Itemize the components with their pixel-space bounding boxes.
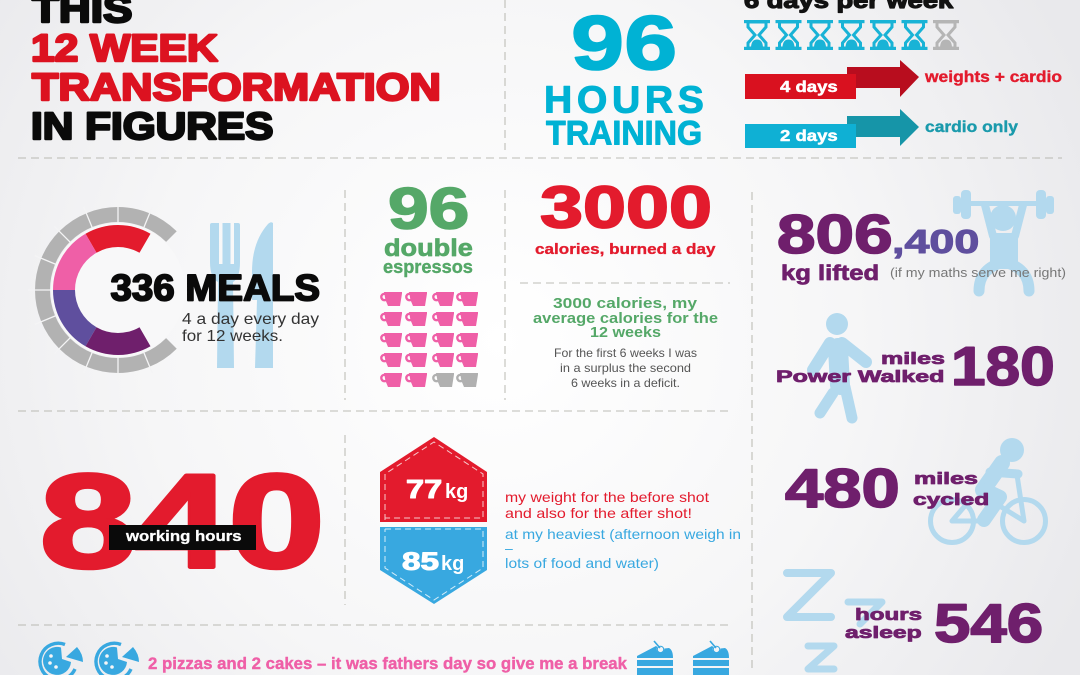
- arrow: 4 days weights + cardio: weights + cardio: [924, 68, 1062, 86]
- text: average calories: average calories for the: [533, 310, 718, 327]
- icon: weightlifter: [953, 190, 1054, 291]
- heading: 336 meals: 336 MEALS: [110, 267, 320, 308]
- panel: 546 hours asleep: asleep: [845, 624, 922, 642]
- text: meals description: 4 a day every day: [182, 311, 319, 328]
- panel: 180 miles power walked: 180: [951, 336, 1055, 397]
- arrow: 4 days weights + cardio: [745, 60, 1062, 99]
- 96 hours training: [544, 0, 708, 153]
- icons: cups: [381, 292, 478, 387]
- icons: pizzas: [40, 643, 139, 675]
- 96 hours training: HOURS: [544, 79, 708, 121]
- arrow: 2 days cardio only: [745, 109, 1019, 148]
- panel: 336 meals: [28, 200, 320, 380]
- text: average calories: 3000 calories, my: [553, 295, 698, 312]
- arrow: 2 days cardio only: cardio only: [925, 118, 1019, 136]
- badge: 85kg: [380, 527, 487, 604]
- panel: espressos: double: [384, 235, 473, 262]
- panel: 180 miles power walked: miles: [881, 349, 945, 368]
- chart: meals ring: [28, 200, 240, 380]
- text: surplus and deficit: 6 weeks in a deficit.: [571, 376, 680, 390]
- text: weight notes: and also for the after shot!: [505, 505, 692, 521]
- text: meals description: [182, 311, 319, 345]
- panel: 180 miles power walked: [776, 336, 1055, 397]
- panel: 806,400 kg lifted: 806: [777, 204, 893, 265]
- arrow: 2 days cardio only: 2 days: [780, 126, 838, 145]
- panel: 806,400 kg lifted: (if my maths serve me right): [890, 265, 1066, 280]
- title: IN FIGURES: [31, 105, 273, 147]
- text: weight notes: –: [505, 540, 513, 556]
- arrow: 4 days weights + cardio: 4 days: [780, 77, 838, 96]
- panel: 840 working hours: 840: [40, 446, 325, 595]
- icon: cyclist: [930, 438, 1046, 542]
- panel: pizzas and cakes: [40, 641, 729, 675]
- text: weight notes: lots of food and water): [505, 555, 659, 571]
- text: average calories: [533, 295, 718, 341]
- panel: 480 miles cycled: 480: [785, 458, 900, 519]
- panel: 3000 calories: calories, burned a day: [535, 241, 716, 258]
- panel: 480 miles cycled: [785, 458, 989, 519]
- panel: 806,400 kg lifted: kg lifted: [781, 261, 879, 284]
- text: weight notes: [505, 489, 741, 571]
- panel: 480 miles cycled: miles: [914, 469, 978, 488]
- text: weight notes: my weight for the before shot: [505, 489, 709, 505]
- icon: fork and knife: [210, 222, 273, 368]
- title: 12 WEEK: [31, 26, 218, 69]
- text: pizzas and cakes: 2 pizzas and 2 cakes – it was fathers day so give me a break: [148, 654, 628, 673]
- panel: 480 miles cycled: cycled: [913, 490, 989, 509]
- icon: sleep Zs: [787, 573, 882, 669]
- badge: 85kg: kg: [441, 553, 464, 575]
- text: surplus and deficit: For the first 6 weeks I was: [554, 346, 697, 360]
- icons: hourglass row: [744, 20, 959, 50]
- panel: 546 hours asleep: [845, 592, 1043, 654]
- text: weight notes: at my heaviest (afternoon weigh in: [505, 526, 741, 542]
- panel: 806,400 kg lifted: ,400: [892, 224, 979, 261]
- text: average calories: 12 weeks: [590, 324, 661, 341]
- badge: 77kg: kg: [445, 481, 468, 503]
- badge: 77kg: [380, 437, 487, 522]
- 96 hours training: 96: [571, 0, 677, 86]
- icon: walker: [813, 313, 866, 418]
- panel: espressos: espressos: [383, 257, 473, 277]
- title: [31, 0, 441, 147]
- panel: 806,400 kg lifted: [777, 204, 1066, 284]
- panel: 840 working hours: working hours: [125, 529, 242, 545]
- panel: espressos: 96: [388, 176, 469, 241]
- badge: 77kg: 77: [406, 475, 442, 504]
- panel: 546 hours asleep: hours: [855, 605, 922, 624]
- panel: 3000 calories: 3000: [540, 174, 712, 240]
- panel: weights badge: [380, 437, 487, 604]
- panel: 546 hours asleep: 546: [934, 592, 1043, 654]
- panel: 3000 calories: [533, 174, 718, 390]
- badge: 85kg: 85: [402, 548, 439, 576]
- text: surplus and deficit: in a surplus the second: [560, 361, 691, 375]
- panel: 180 miles power walked: Power Walked: [776, 367, 944, 386]
- title: TRANSFORMATION: [32, 66, 441, 108]
- 96 hours training: TRAINING: [546, 115, 702, 153]
- panel: espressos: [381, 176, 478, 387]
- text: meals description: for 12 weeks.: [182, 328, 283, 345]
- icons: cakes: [637, 641, 729, 675]
- text: surplus and deficit: [554, 346, 697, 390]
